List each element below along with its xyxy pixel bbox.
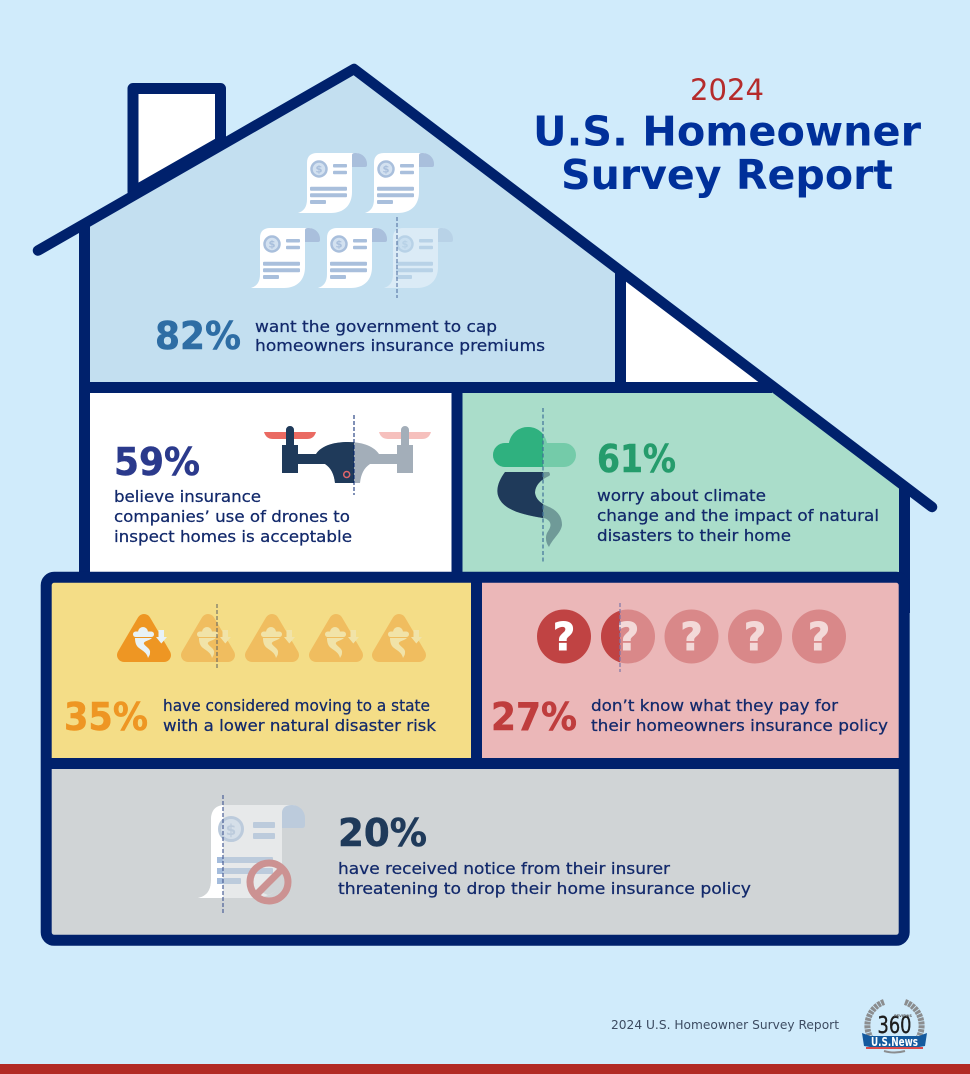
panel: 35% moving (64, 604, 437, 739)
description: inspect homes is acceptable (114, 527, 352, 546)
icon: five question circles: ? (680, 615, 703, 659)
logo: U.S. News 360 reviews: REVIEWS (894, 1014, 912, 1018)
description (597, 486, 879, 545)
house (38, 69, 932, 940)
stat 20%: 20% (338, 811, 427, 855)
panel: 27% unknown premium (491, 603, 888, 739)
panel: drones background (85, 388, 457, 577)
panel: dropped policy background (46, 763, 904, 940)
panel: 61% climate (493, 408, 879, 564)
icon: five question circles: ? (808, 615, 830, 659)
stat 61%: 61% (597, 437, 676, 481)
stat 59%: 59% (114, 440, 200, 484)
description: believe insurance (114, 487, 261, 506)
description (591, 696, 888, 735)
logo: U.S. News 360 reviews: U.S.News (871, 1035, 918, 1049)
description: don’t know what they pay for (591, 696, 838, 715)
icon: drone (264, 415, 431, 495)
chimney (133, 88, 220, 192)
description: have considered moving to a state (163, 696, 430, 715)
panel: 20% dropped policy (198, 795, 751, 915)
title (533, 73, 922, 199)
house outline (38, 69, 932, 940)
title year: 2024 (690, 73, 764, 107)
description: change and the impact of natural (597, 506, 879, 525)
footer source text: 2024 U.S. Homeowner Survey Report (611, 1018, 839, 1032)
description (338, 859, 751, 898)
panel: climate background (457, 388, 905, 577)
description (114, 487, 352, 546)
description: worry about climate (597, 486, 766, 505)
description: threatening to drop their home insurance policy (338, 879, 751, 898)
description: with a lower natural disaster risk (163, 716, 437, 735)
stat 27%: 27% (491, 695, 577, 739)
icon: five disaster warning triangles (124, 604, 422, 670)
icon: five documents (251, 153, 453, 298)
bottom red band (0, 1064, 970, 1074)
description: disasters to their home (597, 526, 791, 545)
logo: U.S. News 360 reviews: 360 (878, 1013, 912, 1039)
panel: moving background (46, 577, 476, 763)
description: want the government to cap (255, 317, 497, 336)
panel: 82% government cap (155, 153, 545, 358)
description: homeowners insurance premiums (255, 336, 545, 355)
icon: policy document with prohibited sign (198, 795, 305, 915)
logo: U.S. News 360 reviews (862, 1002, 927, 1052)
description (163, 696, 437, 735)
icon: five question circles: ? (553, 615, 575, 659)
stat 82%: 82% (155, 314, 241, 358)
stat 35%: 35% (64, 695, 148, 739)
icon: five question circles (537, 603, 846, 672)
description (255, 317, 545, 355)
icon: storm cloud and tornado (493, 408, 576, 564)
panel: 59% drones (114, 415, 431, 546)
description: companies’ use of drones to (114, 507, 350, 526)
title line 1: U.S. Homeowner (533, 108, 922, 156)
panel: premiums background (476, 577, 904, 763)
icon: five question circles: ? (744, 615, 766, 659)
description: have received notice from their insurer (338, 859, 670, 878)
title line 2: Survey Report (561, 151, 893, 199)
icon: five question circles: ? (617, 615, 639, 659)
icon: policy document with prohibited sign: $ (226, 821, 236, 839)
panel: attic (85, 72, 620, 388)
description: their homeowners insurance policy (591, 716, 888, 735)
attic window triangle (620, 273, 775, 388)
